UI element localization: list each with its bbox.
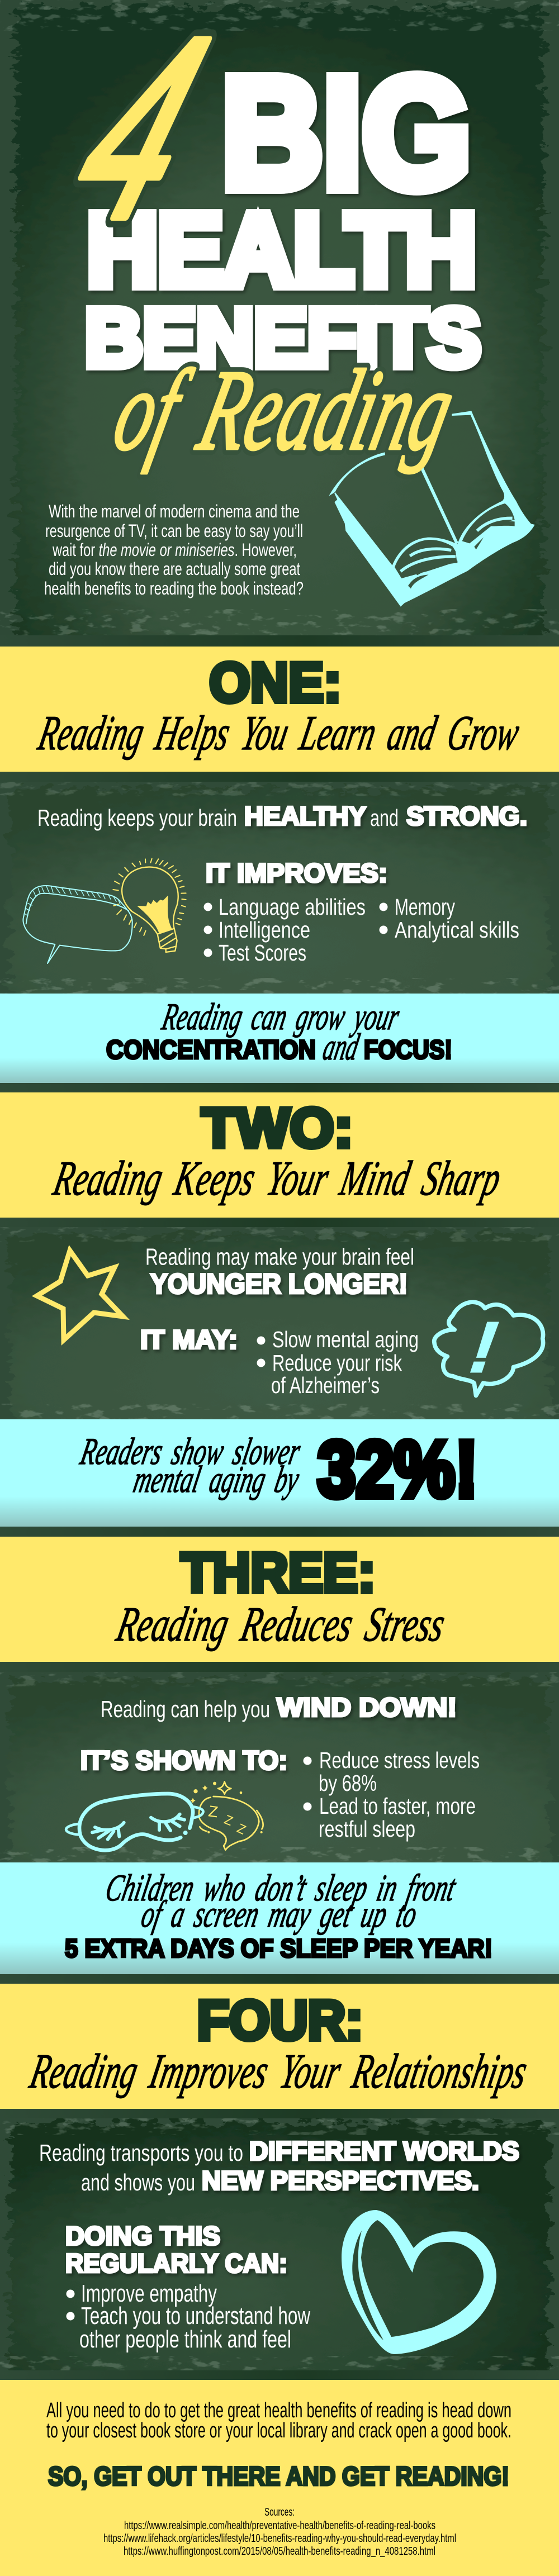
callout: extra days of sleep: of a screen may get up to <box>138 1893 421 1935</box>
heading: doing this regularly can: DOING THIS <box>65 2221 220 2251</box>
title: BIG HEALTH BENEFITS: BIG <box>221 45 471 221</box>
band <box>0 2109 559 2118</box>
bullet list: Reduce stress levels <box>319 1747 480 1773</box>
bullet list: Reduce your risk <box>272 1350 402 1376</box>
intro paragraph: resurgence of TV, it can be easy to say you’ll <box>45 521 303 541</box>
heading: it improves: IT IMPROVES: <box>206 858 387 887</box>
heading: ONE: ONE: <box>209 652 341 713</box>
band <box>0 1662 559 1672</box>
bullet list: Improve empathy <box>81 2280 217 2307</box>
bullet list: Analytical skills <box>395 917 519 943</box>
title: BIG HEALTH BENEFITS <box>85 45 481 384</box>
lead text: Reading transports you to <box>39 2140 243 2166</box>
intro paragraph: did you know there are actually some great <box>49 559 300 579</box>
lead text: WIND DOWN! <box>277 1692 457 1722</box>
lead text: DIFFERENT WORLDS <box>249 2136 519 2166</box>
lead text: Reading keeps your brain <box>37 805 237 831</box>
band <box>0 1218 559 1227</box>
panel: section three heading <box>0 1537 559 1662</box>
callout: concentration and focus <box>0 994 559 1083</box>
lead text: and <box>370 805 399 831</box>
band <box>0 1527 559 1537</box>
heading: doing this regularly can <box>65 2221 287 2278</box>
bullet list: Teach you to understand how <box>81 2302 310 2330</box>
icon: star <box>37 1251 123 1340</box>
bullet list <box>303 1747 480 1842</box>
heading: TWO: TWO: <box>201 1096 353 1159</box>
intro paragraph: wait for the movie or miniseries. However, <box>52 540 297 560</box>
sources: Sources: <box>264 2506 295 2518</box>
lead text: NEW PERSPECTIVES. <box>202 2166 479 2195</box>
band <box>0 1974 559 1984</box>
panel: section two heading <box>0 1092 559 1218</box>
bullet list <box>203 894 519 966</box>
icon: heart <box>342 2210 496 2354</box>
icon: sleep mask and zzz bubble <box>66 1781 263 1850</box>
heading: FOUR: FOUR: <box>197 1989 363 2051</box>
icon: speech bubble and light bulb <box>23 859 186 963</box>
callout: 32 percent: mental aging by <box>130 1458 303 1500</box>
bullet list: Lead to faster, more <box>319 1793 476 1819</box>
sources: https://www.huffingtonpost.com/2015/08/05/health-benefits-reading_n_4081258.html <box>124 2545 435 2558</box>
heading: it may: IT MAY: <box>140 1324 238 1354</box>
lead text: HEALTHY <box>244 801 366 830</box>
sources: https://www.realsimple.com/health/preventative-health/benefits-of-reading-real-books <box>124 2520 435 2532</box>
bullet list: Intelligence <box>219 917 310 943</box>
bullet list <box>66 2280 310 2353</box>
band <box>0 1083 559 1092</box>
icon: open book <box>329 411 535 607</box>
panel: section one content <box>0 782 559 1013</box>
bullet list: Memory <box>395 894 455 920</box>
lead text <box>37 801 527 831</box>
bullet list: of Alzheimer’s <box>271 1372 380 1398</box>
intro paragraph: health benefits to reading the book instead? <box>44 578 304 598</box>
bullet list: restful sleep <box>319 1816 415 1842</box>
panel: section three content <box>0 1672 559 1862</box>
lead text: YOUNGER LONGER! <box>150 1268 408 1300</box>
callout: concentration and focus: CONCENTRATION <box>106 1035 316 1064</box>
bullet list: Slow mental aging <box>272 1327 419 1352</box>
icon: sleep mask and zzz bubble: Z <box>222 1812 235 1828</box>
callout: concentration and focus: FOCUS! <box>364 1035 452 1064</box>
panel: title header <box>0 0 559 650</box>
band <box>0 772 559 782</box>
callout: extra days of sleep <box>0 1862 559 1974</box>
bullet list: by 68% <box>319 1770 377 1796</box>
icon: sleep mask and zzz bubble: Z <box>207 1802 219 1821</box>
panel: section two content <box>0 1227 559 1419</box>
heading: THREE: THREE: <box>181 1541 376 1604</box>
conclusion text <box>46 2399 511 2442</box>
icon: thought cloud with exclamation mark <box>434 1302 543 1396</box>
title: BIG HEALTH BENEFITS: HEALTH <box>87 192 476 307</box>
sources <box>103 2506 456 2558</box>
callout: 32 percent: Readers show slower <box>77 1430 304 1472</box>
panel: section four content <box>0 2118 559 2397</box>
callout: 32 percent: 32%! <box>318 1425 478 1514</box>
lead text <box>39 2136 519 2195</box>
panel: conclusion and sources <box>0 2380 559 2576</box>
lead text: Reading can help you <box>101 1696 270 1722</box>
lead text: and shows you <box>81 2169 195 2195</box>
panel: section one heading <box>0 647 559 772</box>
callout: concentration and focus: and <box>320 1026 363 1068</box>
title: BIG HEALTH BENEFITS: BENEFITS <box>85 292 481 384</box>
lead text: Reading may make your brain feel <box>145 1244 414 1270</box>
callout: extra days of sleep: 5 EXTRA DAYS OF SLEEP PER YEAR! <box>65 1933 492 1962</box>
bullet list <box>257 1327 419 1398</box>
icon: sleep mask and zzz bubble: Z <box>235 1821 248 1837</box>
icon: thought cloud with exclamation mark: ! <box>466 1308 501 1387</box>
bullet list: Test Scores <box>219 940 306 966</box>
bullet list: Language abilities <box>219 894 366 920</box>
bullet list: other people think and feel <box>79 2326 291 2353</box>
heading: doing this regularly can: REGULARLY CAN: <box>65 2249 287 2278</box>
intro paragraph: With the marvel of modern cinema and the <box>49 501 300 521</box>
band <box>0 2370 559 2380</box>
lead text <box>145 1244 414 1300</box>
callout: 32 percent <box>0 1419 559 1527</box>
intro paragraph <box>44 501 304 598</box>
heading: it's shown to: IT’S SHOWN TO: <box>80 1746 287 1775</box>
panel: section four heading <box>0 1984 559 2109</box>
lead text: STRONG. <box>406 801 527 830</box>
lead text <box>101 1692 457 1722</box>
callout: concentration and focus: Reading can grow your <box>158 996 403 1038</box>
